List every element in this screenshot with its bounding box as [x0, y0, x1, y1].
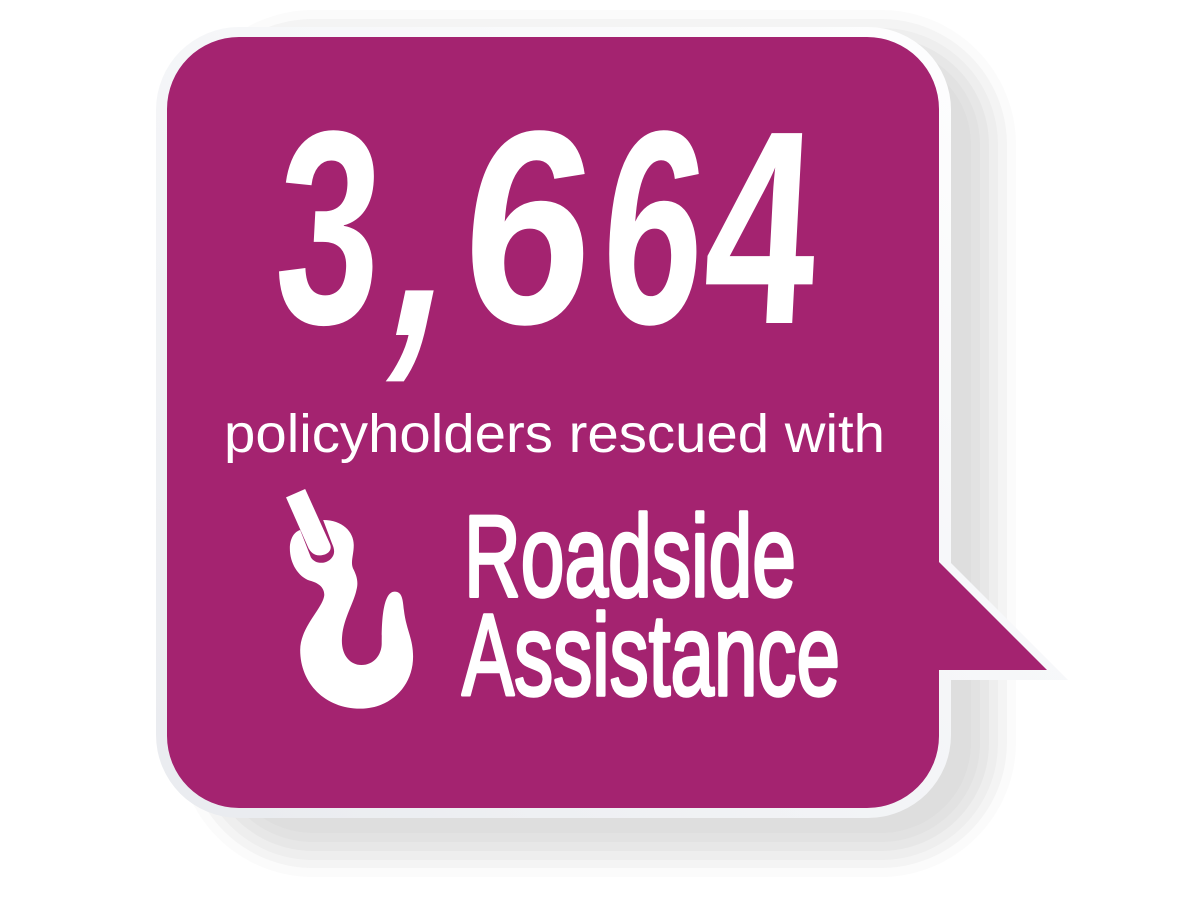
big number: 4 [698, 74, 825, 383]
service name: Roadside [464, 491, 796, 621]
big number [269, 64, 825, 399]
subheading: policyholders rescued with [224, 404, 885, 464]
big number: 6 [593, 73, 716, 382]
big number: , [368, 64, 495, 399]
speech bubble panel [167, 37, 1047, 808]
service name [462, 491, 840, 720]
speech bubble outline [156, 27, 1068, 818]
service name: Assistance [462, 590, 840, 720]
big number: 6 [454, 74, 604, 382]
stepped drop shadow [178, 10, 1016, 877]
big number: 3 [269, 74, 389, 383]
icon: tow hook [286, 489, 413, 709]
